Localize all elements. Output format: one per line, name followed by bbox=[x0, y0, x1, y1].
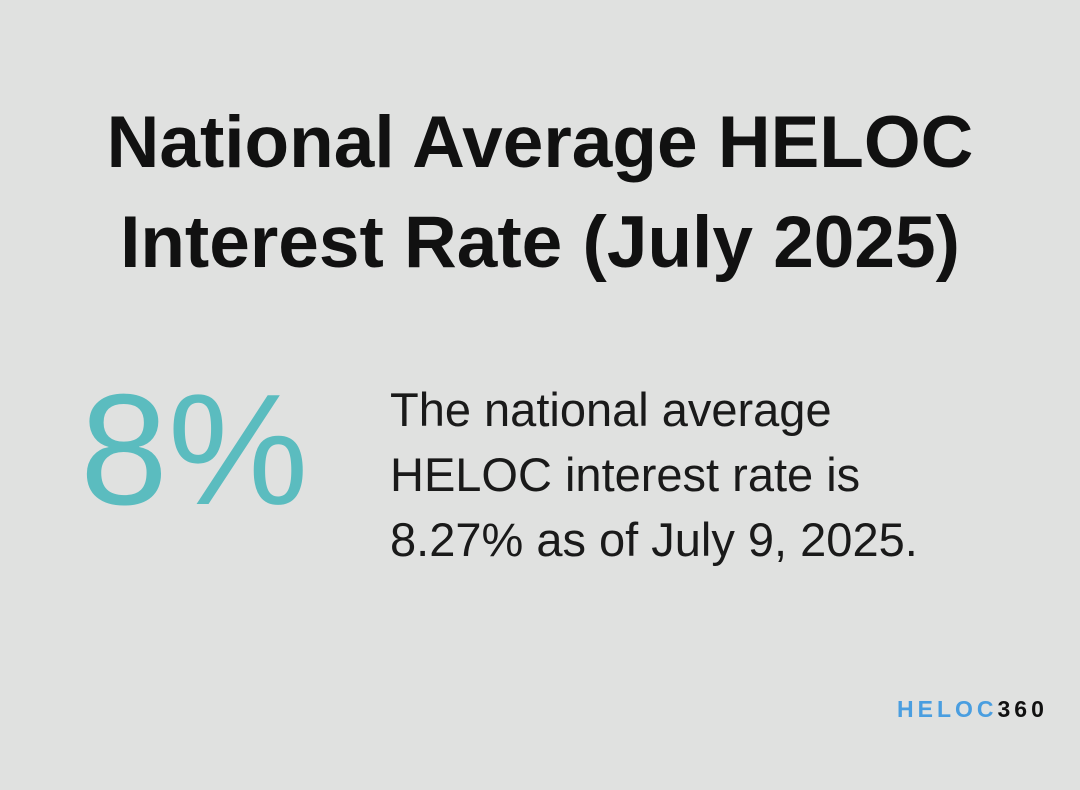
title: Interest Rate (July 2025) bbox=[120, 202, 960, 283]
logo: HELOC360 bbox=[897, 696, 1048, 722]
big stat: 8% bbox=[80, 362, 308, 538]
description text: HELOC interest rate is bbox=[390, 448, 860, 501]
title bbox=[107, 102, 973, 283]
description text: 8.27% as of July 9, 2025. bbox=[390, 513, 918, 566]
title: National Average HELOC bbox=[107, 102, 973, 183]
description text bbox=[390, 383, 918, 566]
description text: The national average bbox=[390, 383, 832, 436]
